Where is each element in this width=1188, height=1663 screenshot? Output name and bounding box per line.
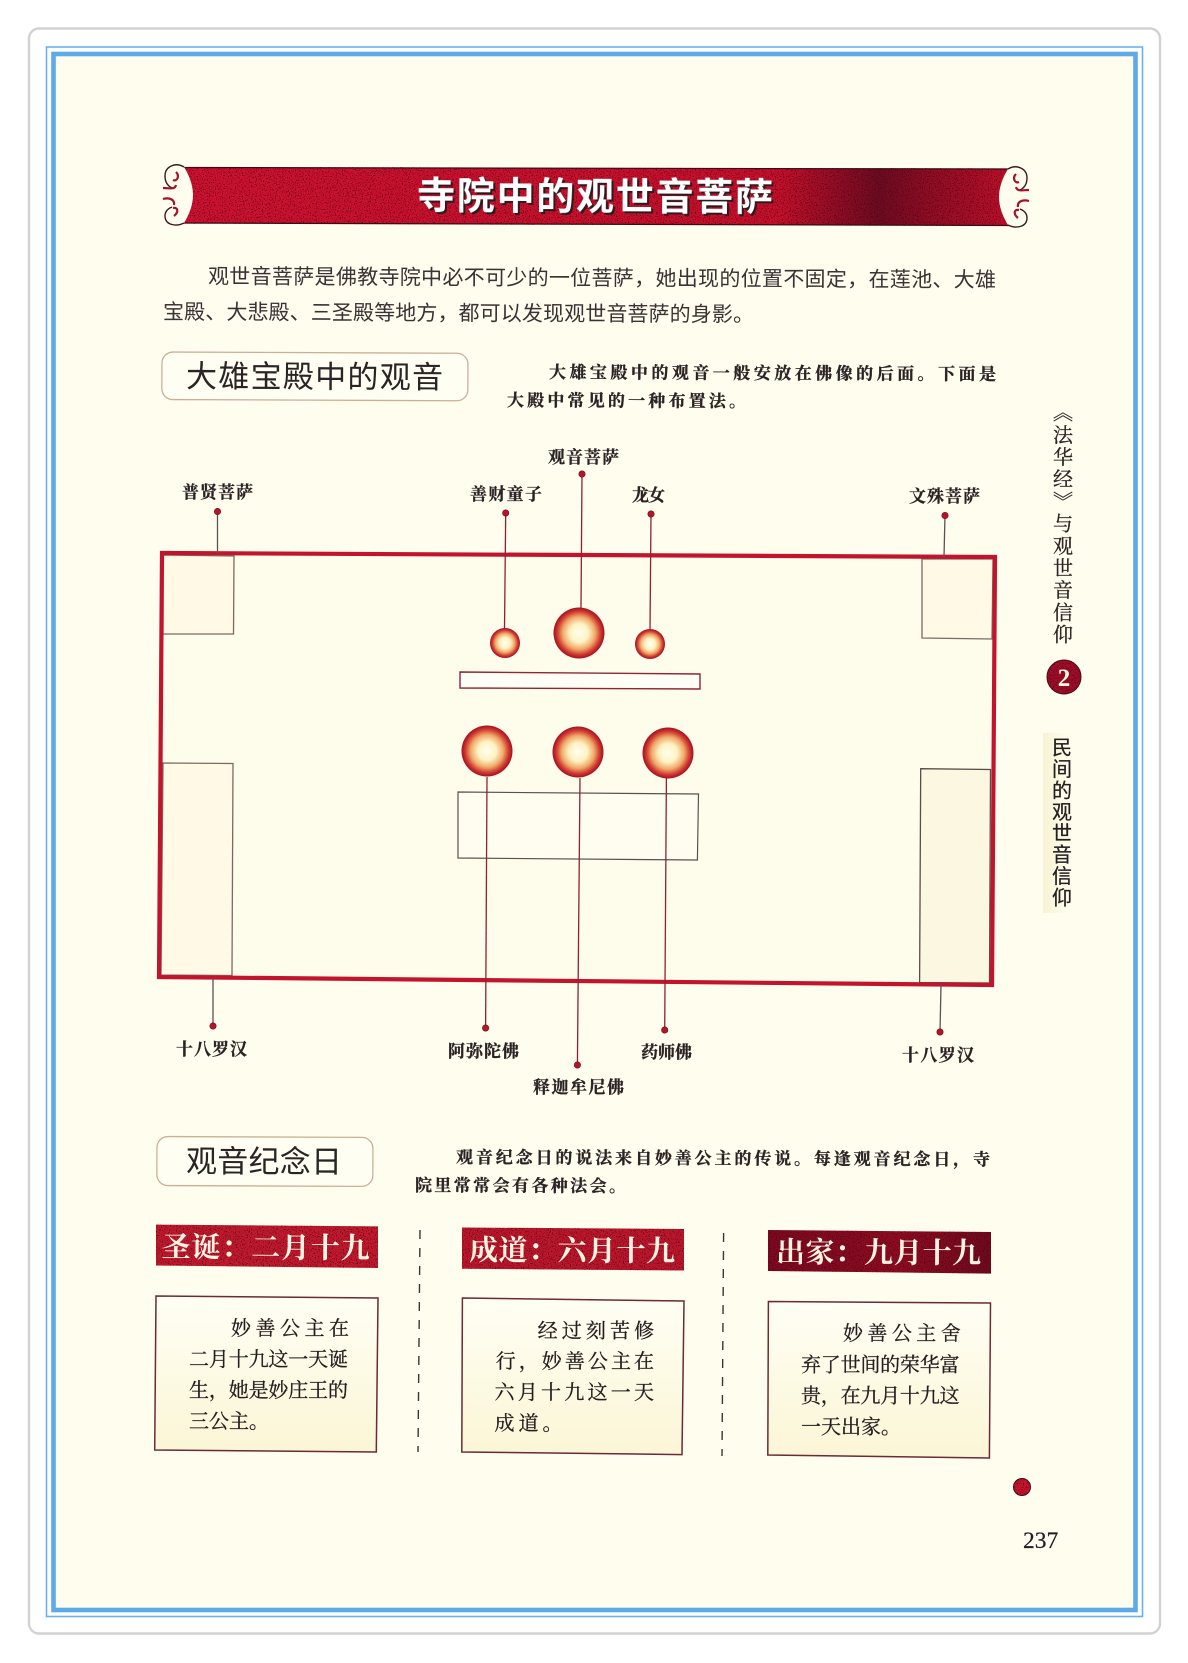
dashed divider 1 [418, 1230, 420, 1452]
section heading: 观音纪念日: 观音纪念日 [186, 1144, 342, 1180]
diagram labels [176, 447, 980, 1097]
column: 成道: 成道。 [494, 1412, 562, 1435]
altar block [458, 792, 698, 860]
leader end dots [210, 471, 948, 1068]
statue: 龙女 [635, 629, 665, 659]
card [768, 1302, 990, 1458]
description: 大雄宝殿: 大殿中常见的一种布置法。 [507, 390, 746, 411]
sidebar: chapter number badge [1047, 660, 1081, 694]
column: 成道: 成道：六月十九 [469, 1234, 675, 1268]
diagram labels: 十八罗汉 [176, 1040, 247, 1059]
statue: 善财童子 [490, 628, 520, 658]
sidebar: chapter number badge: 2 [1058, 665, 1070, 692]
description: 大雄宝殿 [507, 362, 996, 411]
diagram labels: 药师佛 [641, 1043, 692, 1062]
corner room: top right [922, 559, 993, 639]
diagram labels: 释迦牟尼佛 [533, 1077, 624, 1097]
page number: 237 [1023, 1528, 1058, 1554]
sidebar: section tab [1043, 733, 1073, 913]
hall outer wall [159, 553, 995, 985]
section heading: 观音纪念日 [157, 1136, 373, 1186]
statue: 观音菩萨 [554, 608, 604, 658]
column: 成道: 六月十九这一天 [494, 1381, 654, 1404]
column: 出家: 贵，在九月十九这 [801, 1385, 960, 1408]
dashed divider 2 [722, 1233, 724, 1456]
footer ornament [1014, 1478, 1030, 1496]
side room: bottom right [920, 769, 990, 983]
tab [156, 1225, 378, 1268]
side room: bottom left [161, 763, 233, 976]
description: 大雄宝殿: 大雄宝殿中的观音一般安放在佛像的后面。下面是 [549, 362, 996, 384]
column: 圣诞: 生，她是妙庄王的 [189, 1379, 348, 1402]
title text: 寺院中的观世音菩萨 [417, 176, 773, 220]
diagram labels: 观音菩萨 [548, 447, 619, 467]
sidebar: section tab: 民间的观世音信仰 [1048, 737, 1072, 908]
section heading: 大雄宝殿中的观音: 大雄宝殿中的观音 [186, 359, 443, 395]
diagram labels: 文殊菩萨 [909, 486, 980, 506]
description: 观音纪念日 [415, 1147, 990, 1196]
altar bar [460, 672, 700, 689]
diagram labels: 阿弥陀佛 [448, 1042, 519, 1061]
card [462, 1298, 684, 1455]
column: 出家: 一天出家。 [801, 1416, 901, 1439]
column: 出家: 弃了世间的荣华富 [801, 1354, 960, 1377]
column: 圣诞: 圣诞：二月十九 [162, 1231, 370, 1265]
column: 圣诞: 三公主。 [189, 1410, 269, 1433]
tab [462, 1228, 684, 1270]
floor plan diagram [159, 447, 995, 1097]
corner room: top left [163, 555, 234, 634]
tab [768, 1230, 991, 1274]
column: 成道: 经过刻苦修 [538, 1320, 654, 1342]
column: 出家: 出家：九月十九 [776, 1236, 981, 1270]
column: 成道: 行，妙善公主在 [496, 1350, 654, 1373]
column: 出家 [768, 1230, 991, 1458]
column: 成道 [462, 1228, 684, 1455]
intro paragraph: 宝殿、大悲殿、三圣殿等地方，都可以发现观世音菩萨的身影。 [163, 301, 754, 327]
column: 圣诞: 妙善公主在 [231, 1317, 349, 1340]
column: 圣诞 [155, 1225, 378, 1452]
left cloud end [163, 165, 193, 225]
diagram labels: 十八罗汉 [902, 1046, 974, 1065]
hall floor [159, 553, 995, 985]
statue: 释迦牟尼佛 [552, 726, 604, 778]
card [155, 1296, 378, 1452]
description: 观音纪念日: 院里常常会有各种法会。 [415, 1175, 626, 1196]
column: 出家: 妙善公主舍 [843, 1322, 961, 1345]
section heading: 大雄宝殿中的观音 [162, 352, 468, 401]
statue: 药师佛 [642, 728, 694, 778]
diagram labels: 龙女 [632, 486, 666, 505]
intro paragraph [163, 266, 996, 327]
column: 圣诞: 二月十九这一天诞 [189, 1348, 348, 1371]
diagram labels: 普贤菩萨 [182, 482, 253, 502]
leader lines [213, 474, 945, 1065]
description: 观音纪念日: 观音纪念日的说法来自妙善公主的传说。每逢观音纪念日，寺 [456, 1147, 990, 1170]
diagram labels: 善财童子 [470, 484, 542, 504]
statue: 阿弥陀佛 [462, 726, 512, 776]
intro paragraph: 观世音菩萨是佛教寺院中必不可少的一位菩萨，她出现的位置不固定，在莲池、大雄 [208, 266, 996, 292]
sidebar: chapter title: 《法华经》与观世音信仰 [1050, 402, 1072, 646]
right cloud end [999, 167, 1029, 227]
title banner [163, 165, 1029, 227]
